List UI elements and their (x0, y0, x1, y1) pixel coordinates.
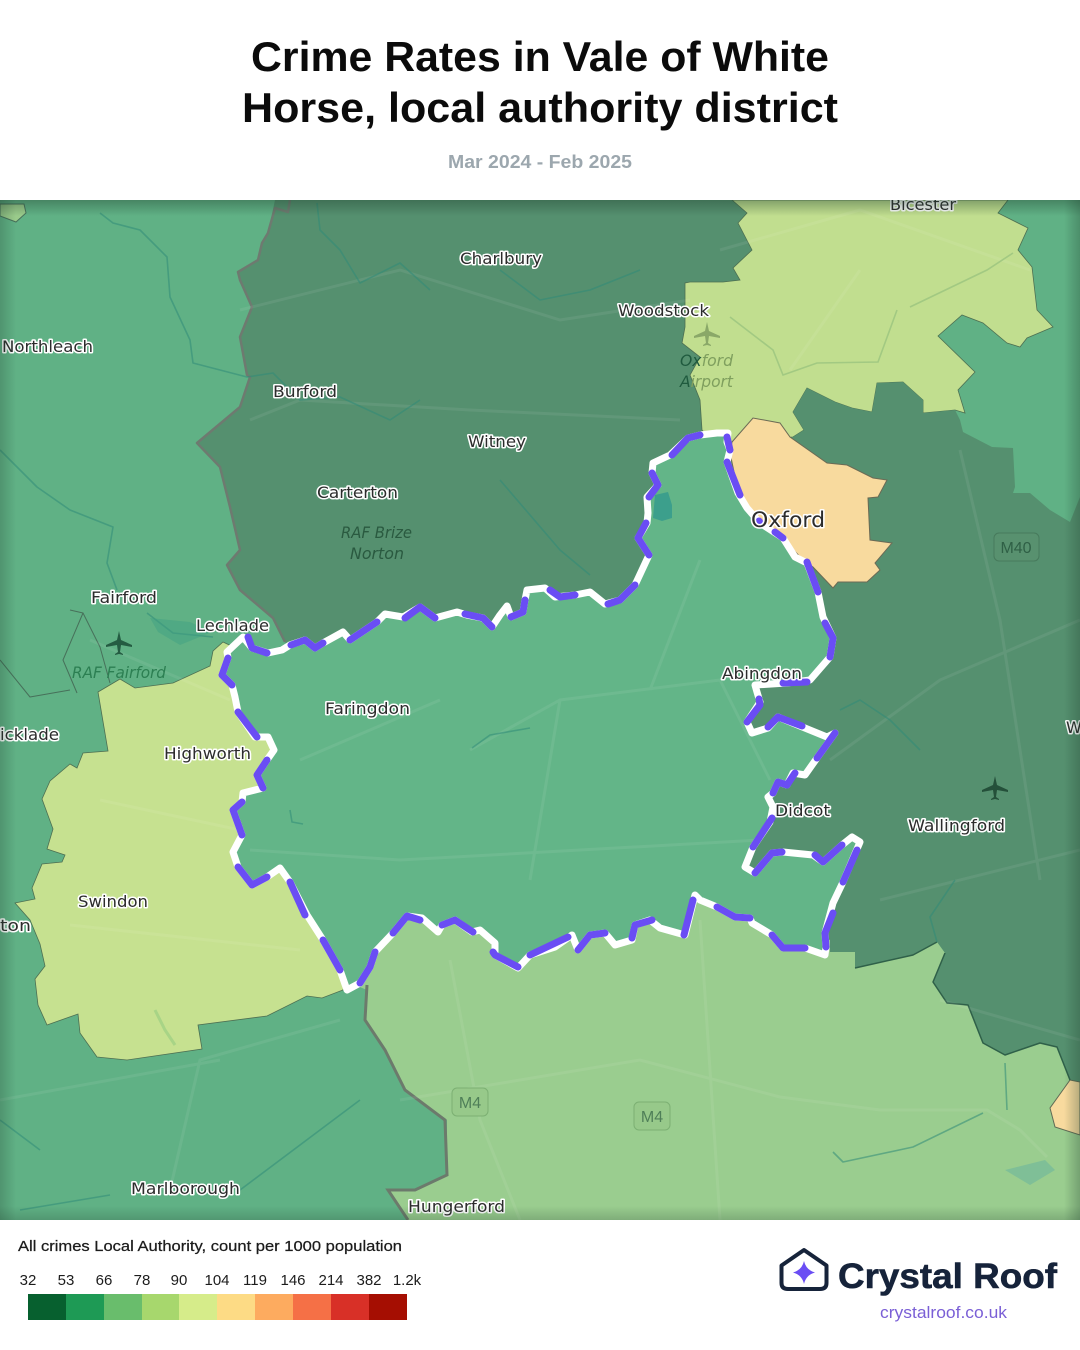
place labels (0, 195, 1080, 1216)
place labels: Northleach (2, 337, 93, 356)
place labels: Lechlade (196, 616, 269, 635)
legend tick labels: 78 (134, 1272, 150, 1289)
place labels: Highworth (164, 744, 251, 763)
place labels: Fairford (91, 588, 157, 607)
legend tick labels: 66 (96, 1272, 112, 1289)
road shield: M4 west (452, 1088, 488, 1116)
map edge vignette (0, 200, 1080, 1220)
place labels: Abingdon (722, 664, 802, 683)
icon: airport Benson (982, 776, 1008, 800)
legend tick labels: 146 (280, 1272, 306, 1289)
airport labels: Norton (350, 544, 404, 563)
boundary: white casing (222, 433, 860, 990)
region: top-left neighbouring district (0, 204, 26, 222)
place labels: ton (0, 916, 31, 935)
title (242, 33, 838, 131)
legend tick labels: 90 (171, 1272, 187, 1289)
place labels: Marlborough (131, 1179, 240, 1198)
airport labels: RAF Fairford (72, 663, 167, 682)
legend colour scale (28, 1294, 407, 1320)
legend tick labels: 119 (243, 1272, 267, 1289)
place labels: icklade (0, 725, 59, 744)
title: Crime Rates in Vale of White (251, 33, 829, 80)
region: West Oxfordshire (197, 200, 752, 670)
lake near Oxford boundary (653, 492, 672, 521)
icon: airport Fairford (106, 631, 132, 655)
legend tick labels (20, 1272, 422, 1289)
road shield: M40: M40 (1000, 540, 1032, 557)
logo: Crystal Roof (782, 1250, 1057, 1322)
roads and streams inside the district (250, 560, 770, 880)
region: Vale of White Horse (222, 433, 860, 990)
region: Oxford (730, 418, 892, 588)
place labels: Charlbury (460, 249, 542, 268)
legend (18, 1238, 422, 1320)
place labels: Wallingford (908, 816, 1005, 835)
roads and rivers (0, 203, 1080, 1220)
West Oxfordshire outline (197, 200, 290, 642)
road shield: M4 east (634, 1102, 670, 1130)
place labels: Faringdon (325, 699, 410, 718)
subtitle: date range: Mar 2024 - Feb 2025 (448, 152, 632, 172)
place labels: Woodstock (618, 301, 710, 320)
road shield: M40 (994, 533, 1039, 561)
legend tick labels: 53 (58, 1272, 74, 1289)
legend tick labels: 104 (204, 1272, 230, 1289)
place labels: Burford (273, 382, 337, 401)
boundary: purple dashes (222, 435, 857, 983)
website url: crystalroof.co.uk (880, 1304, 1008, 1322)
place labels: Swindon (78, 892, 148, 911)
icon: airport Oxford (694, 322, 720, 346)
choropleth map (0, 195, 1080, 1220)
region: district at right edge (1050, 1080, 1080, 1135)
place labels: Didcot (775, 801, 830, 820)
icon: house with star (782, 1250, 826, 1289)
airport labels: Airport (679, 372, 734, 391)
legend tick labels: 32 (20, 1272, 36, 1289)
airport labels (72, 351, 734, 682)
place labels: Witney (468, 432, 526, 451)
road shield: M4 west: M4 (459, 1095, 481, 1112)
place labels: Hungerford (408, 1197, 505, 1216)
place labels: Carterton (317, 483, 398, 502)
road shield: M4 east: M4 (641, 1109, 663, 1126)
region: Cherwell (682, 200, 1053, 450)
region: South Oxfordshire (730, 382, 1080, 1082)
airport labels: RAF Brize (341, 523, 412, 542)
region: West Berkshire (355, 880, 1080, 1220)
airport labels: Oxford (680, 351, 734, 370)
place labels: Bicester (890, 195, 956, 214)
region: Swindon (15, 642, 350, 1060)
district boundary lines (365, 985, 447, 1220)
legend tick labels: 1.2k (393, 1272, 422, 1289)
legend tick labels: 214 (318, 1272, 344, 1289)
legend tick labels: 382 (356, 1272, 382, 1289)
legend title: All crimes Local Authority, count per 1000 population (18, 1238, 402, 1255)
logo wordmark: Crystal Roof (838, 1257, 1057, 1296)
place labels: Oxford (751, 508, 825, 532)
title: Horse, local authority district (242, 84, 838, 131)
